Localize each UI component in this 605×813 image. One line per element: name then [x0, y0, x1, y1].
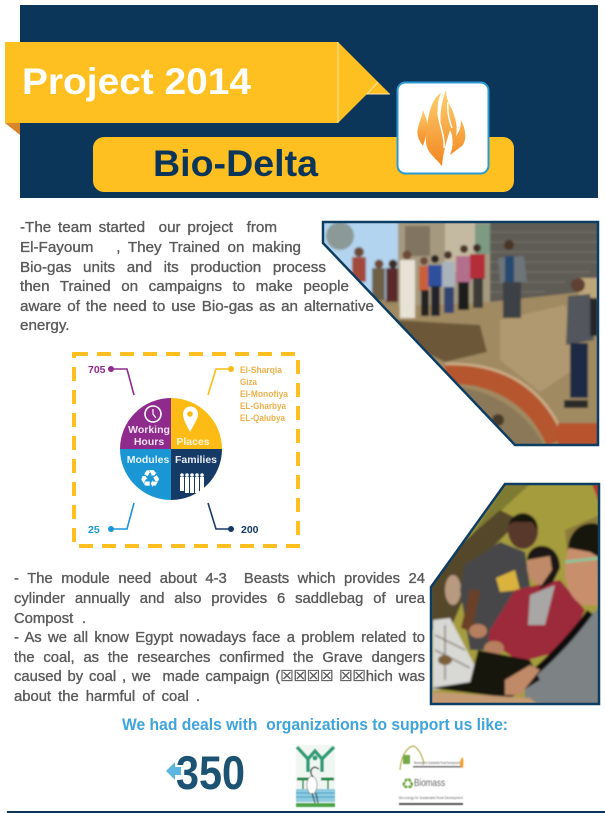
building — [398, 222, 493, 307]
man in red hoodie — [488, 580, 585, 662]
text block: module needs and coal campaign: - The module need about 4-3 Beasts which provides 24 — [14, 571, 425, 587]
lap and arm — [431, 650, 540, 698]
callout: 25 modules: 25 — [88, 524, 100, 536]
text block: project introduction: Bio-gas units and its production process — [20, 259, 326, 276]
pill: Bio-Delta: Bio-Delta — [153, 143, 318, 184]
logo: 350: 350 — [176, 746, 245, 799]
callout: places list: Giza — [240, 377, 258, 388]
text block: module needs and coal campaign: the coal, as the researches confirmed the Grave dangers — [14, 650, 425, 666]
icon: flame — [398, 82, 488, 174]
pie quadrant: working hours: Working — [128, 424, 170, 436]
callout: 25 modules — [88, 503, 134, 536]
brick wall — [490, 222, 600, 306]
callout: places list: El-Monofiya — [240, 389, 289, 400]
logo: Biomass — [399, 746, 464, 805]
header banner — [5, 5, 598, 198]
text block: module needs and coal campaign: cylinder annually and also provides 6 saddlebag of urea — [14, 591, 425, 607]
onlookers — [352, 240, 598, 408]
stove — [433, 618, 478, 690]
ribbon: Project 2014 — [5, 42, 390, 135]
pie quadrant: families — [171, 449, 222, 500]
pie quadrant: families: Families — [175, 454, 217, 466]
callout: 705 working hours: 705 — [88, 364, 106, 376]
text block: module needs and coal campaign: caused by coal , we made campaign (☒☒☒☒ ☒☒hich was — [14, 669, 425, 685]
man in grey shirt — [460, 542, 532, 650]
pie quadrant: modules: ♻ — [139, 465, 161, 493]
text block: project introduction: energy. — [20, 317, 70, 334]
logo: Biomass: Bio-energy for Sustainable Rural Development — [399, 795, 464, 800]
ribbon: Project 2014: Project 2014 — [22, 61, 251, 102]
logo: Biomass: ♻ — [401, 775, 414, 793]
callout: places list: EL-Qalubya — [240, 413, 286, 424]
callout: places list — [208, 365, 289, 424]
text block: project introduction: aware of the need to use Bio-gas as an alternative — [20, 298, 374, 315]
pie quadrant: working hours: Hours — [134, 436, 164, 448]
pill: Bio-Delta — [93, 137, 514, 192]
brick pit — [445, 374, 556, 442]
callout: 200 families: 200 — [241, 524, 259, 536]
man with glasses — [564, 546, 598, 606]
sky and tree — [320, 220, 405, 300]
footer rule — [7, 811, 605, 813]
text block: project introduction — [20, 219, 374, 334]
text block: module needs and coal campaign — [14, 571, 426, 705]
callout: places list: El-Sharqia — [240, 365, 283, 376]
pie quadrant: modules: Modules — [127, 454, 169, 466]
infographic: project statistics — [74, 354, 298, 546]
pie quadrant: places — [171, 398, 222, 449]
text block: module needs and coal campaign: - As we all know Egypt nowadays face a problem related to — [14, 630, 425, 646]
text block: project introduction: El-Fayoum , They Trained on making — [20, 239, 301, 256]
pie quadrant: modules — [120, 449, 171, 500]
callout: places list: EL-Gharbya — [240, 401, 287, 412]
callout: 200 families — [208, 503, 259, 536]
text block: module needs and coal campaign: Compost . — [14, 611, 86, 627]
logo: egret and palm trees — [296, 745, 335, 807]
text block: project introduction: then Trained on campaigns to make people — [20, 278, 349, 295]
text block: project introduction: -The team started our project from — [20, 219, 277, 236]
pie quadrant: places: Places — [176, 436, 210, 448]
logo: Biomass: Bioenergy for Sustainable Rural Development — [414, 761, 460, 765]
photo: team at biogas construction site — [320, 220, 600, 448]
logo: Biomass: Biomass — [414, 777, 445, 789]
photo: three men around a biogas stove — [430, 482, 601, 706]
pie quadrant: working hours — [120, 398, 171, 449]
callout: 705 working hours — [88, 364, 134, 395]
heading: supporting organizations: We had deals with organizations to support us like: — [122, 715, 508, 734]
text block: module needs and coal campaign: about the harmful of coal . — [14, 689, 200, 705]
ground shading — [416, 292, 576, 308]
